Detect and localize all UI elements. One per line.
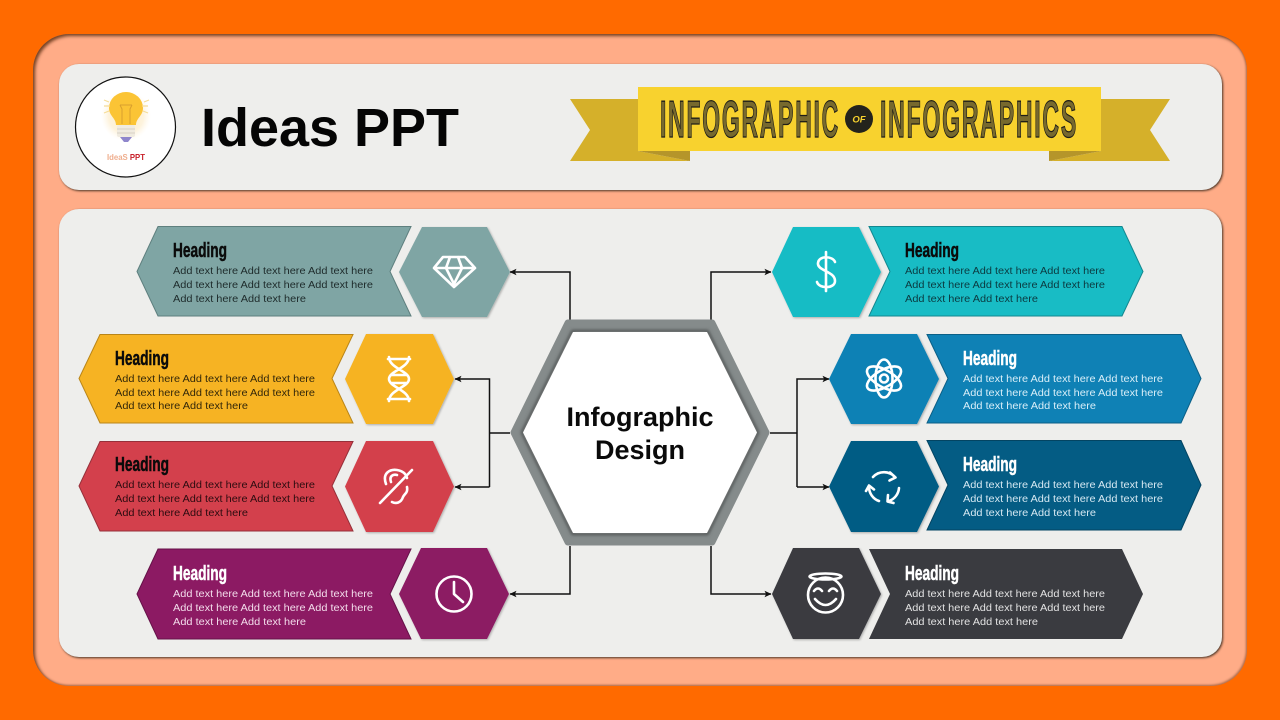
body text: Add text here Add text here Add text here — [905, 279, 1105, 291]
ribbon tails — [570, 99, 1170, 161]
ribbon banner — [570, 87, 1170, 161]
body text: Add text here Add text here — [963, 507, 1096, 519]
body text: Add text here Add text here — [115, 507, 248, 519]
icon: DNA helix — [388, 357, 410, 401]
icon: light bulb — [101, 91, 151, 142]
item: left row 4 purple — [137, 548, 509, 639]
connector arrows — [455, 272, 829, 594]
item: right row 3 dark blue — [829, 440, 1201, 532]
body text: Add text here Add text here — [963, 400, 1096, 412]
title: Ideas PPT: Ideas PPT — [201, 98, 459, 158]
heading: Heading — [115, 454, 169, 476]
icon: clock — [436, 576, 472, 612]
central label: Design — [595, 435, 685, 465]
logo: Ideas PPT badge — [76, 77, 176, 177]
icon: cycle arrows — [866, 472, 899, 503]
body text: Add text here Add text here Add text here — [115, 387, 315, 399]
body text: Add text here Add text here Add text here — [905, 602, 1105, 614]
heading: Heading — [905, 240, 959, 262]
body text: Add text here Add text here — [905, 293, 1038, 305]
item: right row 2 blue — [829, 334, 1201, 424]
item: left row 3 red — [79, 441, 454, 532]
icon: hearing disabled — [380, 470, 412, 503]
central label: Infographic — [566, 402, 714, 432]
body text: Add text here Add text here — [905, 616, 1038, 628]
body text: Add text here Add text here — [173, 293, 306, 305]
item: right row 1 cyan — [772, 226, 1143, 317]
body text: Add text here Add text here Add text here — [905, 588, 1105, 600]
item: right row 4 charcoal — [772, 548, 1143, 639]
ribbon of badge — [845, 105, 873, 133]
item: left row 2 amber — [79, 334, 454, 424]
heading: Heading — [963, 454, 1017, 476]
body text: Add text here Add text here Add text here — [963, 479, 1163, 491]
ribbon banner: INFOGRAPHIC — [660, 91, 840, 149]
heading: Heading — [173, 563, 227, 585]
logo wordmark: IdeaS PPT — [107, 153, 145, 162]
central hexagon — [514, 323, 766, 542]
body text: Add text here Add text here Add text here — [173, 265, 373, 277]
icon: atom — [863, 360, 905, 398]
body text: Add text here Add text here Add text here — [115, 479, 315, 491]
body text: Add text here Add text here — [115, 400, 248, 412]
item: left row 1 teal — [137, 226, 510, 317]
body text: Add text here Add text here Add text here — [115, 373, 315, 385]
heading: Heading — [173, 240, 227, 262]
body text: Add text here Add text here Add text here — [115, 493, 315, 505]
heading: Heading — [963, 348, 1017, 370]
icon: diamond — [434, 257, 475, 287]
icon: dollar — [817, 252, 835, 291]
body text: Add text here Add text here Add text here — [173, 279, 373, 291]
ribbon of badge: OF — [852, 114, 866, 126]
header panel — [59, 64, 1222, 190]
icon: halo smiley — [808, 574, 843, 612]
body text: Add text here Add text here Add text here — [963, 373, 1163, 385]
body text: Add text here Add text here Add text here — [173, 588, 373, 600]
body text: Add text here Add text here Add text here — [905, 265, 1105, 277]
main content panel — [59, 209, 1222, 657]
body text: Add text here Add text here Add text here — [963, 387, 1163, 399]
heading: Heading — [905, 563, 959, 585]
body text: Add text here Add text here Add text here — [173, 602, 373, 614]
body text: Add text here Add text here — [173, 616, 306, 628]
heading: Heading — [115, 348, 169, 370]
body text: Add text here Add text here Add text here — [963, 493, 1163, 505]
